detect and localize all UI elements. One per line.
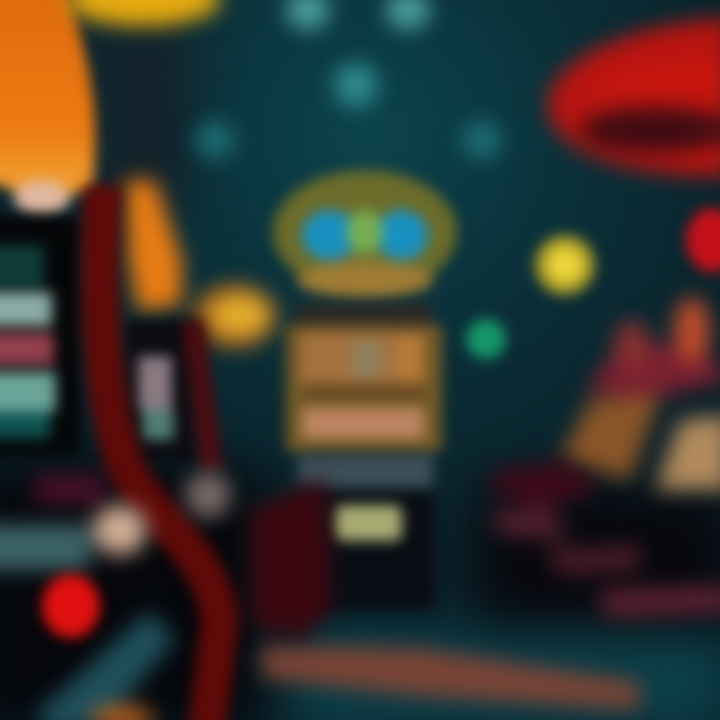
red button [42,574,100,638]
right seats [560,297,720,490]
top-left orange canopy [0,0,95,216]
green dot [466,319,506,359]
yellow lamp left [193,284,277,348]
floor stripe [262,645,640,710]
left machine [0,215,80,455]
dark red cable [100,185,220,720]
top yellow light [65,0,221,26]
lower-left console [0,472,231,720]
top-right red ring [548,18,720,176]
central machine crown [273,170,457,298]
second orange panel [125,180,182,312]
red lamp [686,208,720,272]
right dark red stripes [490,460,720,618]
dark red seat near centre [250,478,332,640]
central machine body [286,303,442,610]
second machine stripes [125,320,195,460]
yellow dot [535,235,595,295]
glowing dots on wall [195,0,502,160]
